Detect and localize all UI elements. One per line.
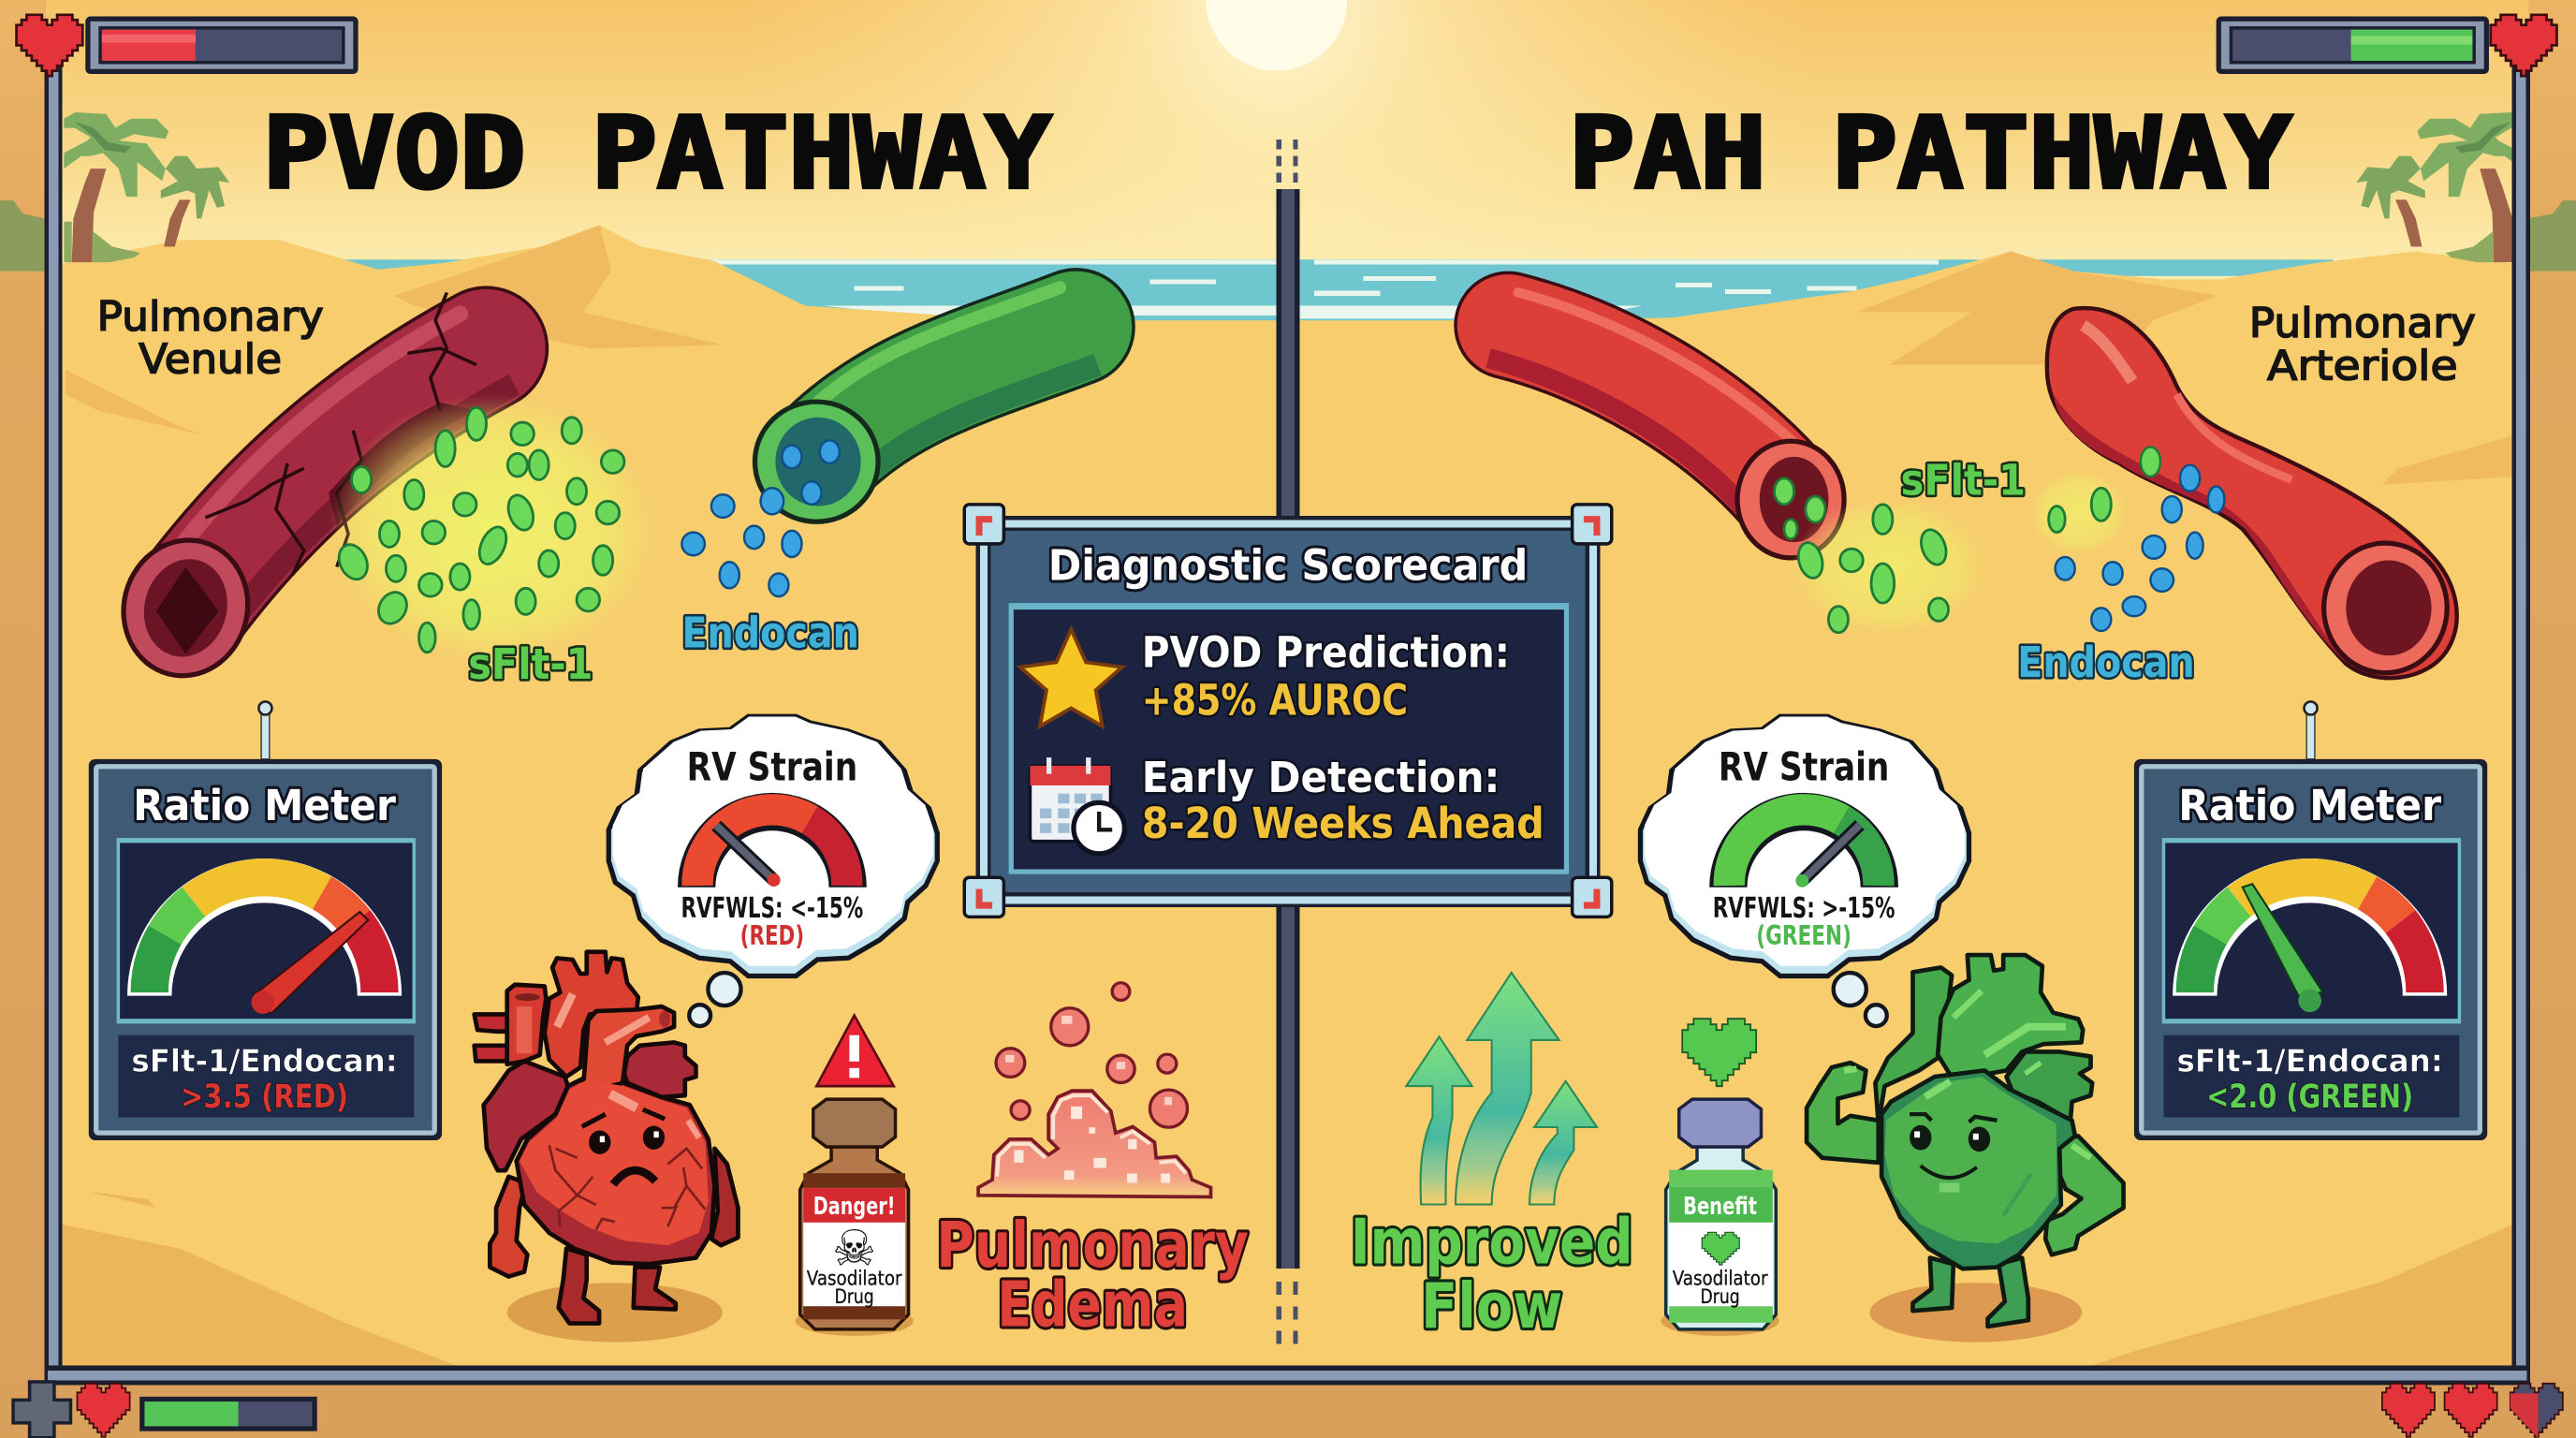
- label: pulmonary venule: Pulmonary: [97, 293, 324, 341]
- corner knobs: [964, 505, 1612, 917]
- vessel: PAH narrowed pulmonary arteriole: [2047, 308, 2457, 678]
- health bar top right: [2217, 15, 2556, 76]
- title: PAH pathway: PAH PATHWAY: [1569, 95, 2291, 211]
- thought bubble: RV strain red: RVFWLS: <-15%: [681, 892, 863, 925]
- palm trees left: [64, 112, 229, 262]
- label: pulmonary arteriole: Pulmonary: [2249, 300, 2476, 347]
- vial: danger vasodilator drug: [795, 1099, 914, 1336]
- heading: improved flow: Flow: [1421, 1269, 1562, 1343]
- gauge screen: [117, 838, 416, 1023]
- label: Endocan PVOD: Endocan: [681, 609, 859, 658]
- heading: Ratio Meter: [133, 781, 396, 830]
- palm trees right: [2356, 112, 2522, 262]
- heading: Ratio Meter: [2178, 781, 2442, 830]
- icon: star: [1020, 629, 1122, 726]
- panel: diagnostic scorecard: [964, 505, 1612, 917]
- character: sad red heart: [475, 952, 738, 1343]
- ratio readout: <2.0 (GREEN): [2206, 1078, 2413, 1116]
- early detection text: Early Detection:: [1142, 753, 1500, 802]
- icon: heart top left: [17, 15, 82, 76]
- thought bubble: RV strain green: (GREEN): [1756, 920, 1852, 951]
- ratio readout: sFlt-1/Endocan:: [131, 1042, 398, 1078]
- label: sFlt-1 PVOD: sFlt-1: [468, 639, 593, 689]
- icon: heart top right: [2491, 15, 2556, 76]
- label: vasodilator drug: Drug: [835, 1284, 874, 1308]
- character: strong green heart: [1807, 955, 2124, 1343]
- label: Benefit: Benefit: [1683, 1192, 1757, 1220]
- early detection text: 8-20 Weeks Ahead: [1142, 799, 1544, 848]
- ratio readout: sFlt-1/Endocan:: [2177, 1042, 2443, 1078]
- arrows: improved flow: [1406, 973, 1597, 1204]
- icon: d-pad: [13, 1382, 70, 1438]
- panel: ratio meter left: [89, 701, 442, 1140]
- thought bubble: RV strain red: (RED): [740, 920, 804, 951]
- gauge: RV red: [696, 810, 848, 888]
- ratio readout: [118, 1035, 414, 1117]
- icon: heart bottom left: [77, 1384, 130, 1437]
- vessel: PAH open red artery: [1488, 292, 1847, 560]
- Endocan particles PAH: [2056, 447, 2224, 631]
- ratio readout: >3.5 (RED): [181, 1078, 348, 1116]
- sFlt-1 particles PVOD: [329, 394, 657, 664]
- heading: Diagnostic Scorecard: [1048, 541, 1528, 591]
- thought bubble: RV strain green: RVFWLS: >-15%: [1713, 892, 1895, 925]
- label: Endocan PAH: Endocan: [2017, 638, 2195, 687]
- thought bubble: RV strain green: [1640, 716, 1969, 1026]
- gauge screen: [2162, 838, 2461, 1023]
- heading: improved flow: Improved: [1351, 1206, 1633, 1279]
- sFlt-1 particles PAH: [1775, 470, 2128, 636]
- icon: skull and crossbones: ☠: [832, 1220, 876, 1277]
- vial: benefit vasodilator drug: [1661, 1099, 1779, 1336]
- thought bubble: RV strain red: RV Strain: [687, 744, 857, 790]
- icons: hearts bottom right: [2382, 1384, 2563, 1438]
- thought bubble: RV strain red: [608, 716, 937, 1026]
- gauge: RV green: [1728, 810, 1880, 888]
- thought bubble: RV strain green: RV Strain: [1719, 744, 1889, 790]
- pulmonary edema bubbles: [978, 983, 1211, 1197]
- vessel: ruptured pulmonary venule: [106, 292, 514, 693]
- vessel: healthy green venule: [753, 287, 1097, 524]
- PVOD prediction text: PVOD Prediction:: [1142, 628, 1510, 678]
- icon: green heart: [1682, 1019, 1756, 1086]
- icon: warning triangle: [816, 1016, 894, 1086]
- health bar bottom left: [139, 1397, 317, 1431]
- heading: pulmonary edema: Edema: [997, 1268, 1188, 1341]
- label: vasodilator drug: Vasodilator: [807, 1266, 902, 1289]
- ratio readout: [2163, 1035, 2459, 1117]
- label: sFlt-1 PAH: sFlt-1: [1901, 455, 2026, 505]
- icon: label heart: [1702, 1232, 1739, 1265]
- label: Danger: Danger!: [813, 1192, 896, 1220]
- label: vasodilator drug: Drug: [1701, 1284, 1740, 1308]
- label: pulmonary arteriole: Arteriole: [2267, 342, 2458, 389]
- inner screen: [1009, 603, 1569, 874]
- PVOD prediction text: +85% AUROC: [1142, 675, 1408, 725]
- panel: ratio meter right: [2134, 701, 2487, 1140]
- label: pulmonary venule: Venule: [139, 335, 282, 383]
- heading: pulmonary edema: Pulmonary: [936, 1209, 1249, 1282]
- icon: calendar and clock: [1030, 757, 1124, 854]
- label: vasodilator drug: Vasodilator: [1673, 1266, 1768, 1289]
- Endocan particles PVOD: [681, 488, 801, 596]
- centre divider: [1277, 139, 1299, 1344]
- title: PVOD pathway: PVOD PATHWAY: [263, 95, 1051, 211]
- health bar top left: [17, 15, 359, 76]
